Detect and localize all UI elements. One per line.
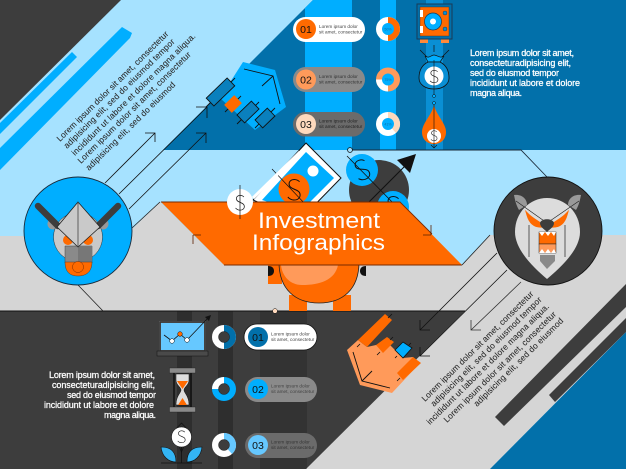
icon: laptop chart xyxy=(157,315,211,356)
icon: piggy bank xyxy=(268,262,366,313)
step 01 pill dark: sit amet, consectetur xyxy=(271,337,315,342)
step 03 pill: 03 xyxy=(300,119,312,131)
title: Investment xyxy=(258,208,380,233)
icon: burning money xyxy=(422,102,446,148)
decorative blue short bar xyxy=(0,52,77,134)
step 01 pill dark: Lorem ipsum dolor xyxy=(271,332,310,336)
background: grey band xyxy=(0,202,626,469)
icon: growth coins and arrow: S xyxy=(347,148,376,191)
text block: bottom right rotated: adipisicing elit, sed do eiusmod tempor xyxy=(428,294,544,408)
icon: dollar coin xyxy=(227,152,300,219)
step 03 pill dark: sit amet, consectetur xyxy=(271,445,315,450)
step 02 pill dark xyxy=(245,377,317,402)
text block: top right: sed do eiusmod tempor xyxy=(470,68,559,78)
text block: top left rotated: incididunt ut labore et dolore magna aliqua. xyxy=(69,31,197,157)
background: light blue xyxy=(0,0,626,236)
text block: top right: incididunt ut labore et dolore xyxy=(470,78,580,88)
step 02 pill dark: sit amet, consectetur xyxy=(271,389,315,394)
step 01 pill: sit amet, consectetur xyxy=(319,30,363,34)
step 03 pill xyxy=(293,112,365,136)
step 03 pill: sit amet, consectetur xyxy=(319,124,363,129)
panel: top dark corner xyxy=(0,0,121,120)
decorative bottom right blue xyxy=(490,332,626,469)
panel: bottom dark xyxy=(0,285,465,469)
icon: candlestick up pentagon xyxy=(206,62,286,130)
step 03 pill dark: 03 xyxy=(252,440,264,452)
text block: top right xyxy=(470,48,580,98)
step 01 pill xyxy=(293,17,365,42)
text block: bottom right rotated: Lorem ipsum dolor sit amet, consectetur xyxy=(441,309,558,424)
step 01 pill: Lorem ipsum dolor xyxy=(319,24,358,29)
arrows: down from bear xyxy=(420,253,521,356)
donut 50%: 50% xyxy=(384,28,392,32)
text block: bottom left: Lorem ipsum dolor sit amet, xyxy=(49,370,155,380)
icon: money plant xyxy=(161,423,202,463)
decorative dark thin bar xyxy=(549,318,626,402)
step 01 pill dark: 01 xyxy=(252,332,264,344)
step 03 pill dark xyxy=(245,433,317,458)
donut two xyxy=(212,377,236,401)
text block: top right: magna aliqua. xyxy=(470,88,522,98)
text block: top right: Lorem ipsum dolor sit amet, xyxy=(470,48,574,58)
text block: top right: consecteturadipisicing elit, xyxy=(470,58,571,68)
step 03 pill: Lorem ipsum dolor xyxy=(319,118,358,124)
banner: title ribbon: Infographics xyxy=(252,230,385,255)
step 02 pill: 02 xyxy=(300,74,312,86)
donut three xyxy=(212,433,236,457)
arrows: up from bull xyxy=(105,107,207,209)
icon: money plant: S xyxy=(177,423,186,448)
text block: bottom right rotated: incididunt ut labore et dolore magna aliqua. xyxy=(424,301,551,426)
decorative dark thick bar xyxy=(495,284,626,426)
step 02 pill: Lorem ipsum dolor xyxy=(319,74,358,79)
text block: top left rotated: Lorem ipsum dolor sit amet, consectetur xyxy=(54,29,170,143)
step 03 pill dark: Lorem ipsum dolor xyxy=(271,440,310,444)
donut 41%: 41% xyxy=(384,122,392,126)
icon: hourglass xyxy=(170,368,196,412)
step 01 pill: 01 xyxy=(300,24,312,36)
text block: top left rotated: Lorem ipsum dolor sit amet, consectetur xyxy=(75,49,193,165)
step 02 pill xyxy=(293,67,365,92)
panel: bottom steps xyxy=(212,324,317,458)
text block: bottom right rotated: Lorem ipsum dolor sit amet, consectetur xyxy=(419,289,535,403)
icon: bear circle xyxy=(494,177,602,285)
text block: top left rotated: adipisicing elit, sed do eiusmod tempor xyxy=(61,36,177,150)
step 01 pill dark xyxy=(244,324,317,350)
panel: top steps xyxy=(293,17,400,136)
icon: money bill xyxy=(253,143,341,220)
decorative blue long bar xyxy=(0,27,132,170)
banner: title ribbon xyxy=(132,202,490,265)
donut 75%: 75% xyxy=(384,78,392,82)
icon: dollar coin: S xyxy=(234,187,246,216)
icon: money bill: S xyxy=(286,169,302,209)
icon: money bag: S xyxy=(429,63,439,89)
icon: candlestick down pentagon xyxy=(347,314,421,393)
icon: growth coins and arrow: S xyxy=(385,186,401,226)
text block: bottom left: incididunt ut labore et dolore xyxy=(44,400,154,410)
icon: burning money: S xyxy=(430,126,438,146)
step 02 pill dark: Lorem ipsum dolor xyxy=(271,384,310,388)
icon: money bag xyxy=(419,45,449,98)
icon: growth coins and arrow xyxy=(346,148,416,226)
donut one xyxy=(212,325,236,349)
icon: bull circle xyxy=(24,177,132,285)
text block: bottom right rotated: adipisicing elit, sed do eiusmod xyxy=(471,315,566,408)
text block: top left rotated: adipisicing elit, sed do eiusmod xyxy=(83,79,178,172)
text block: bottom left: sed do eiusmod tempor xyxy=(67,390,156,400)
step 02 pill dark: 02 xyxy=(252,384,264,396)
text block: bottom left: magna aliqua. xyxy=(104,410,156,420)
panel: top right blue xyxy=(163,0,626,177)
icon: safe xyxy=(417,4,452,43)
text block: bottom left: consecteturadipisicing elit, xyxy=(52,380,155,390)
text block: bottom left xyxy=(44,370,156,420)
step 02 pill: sit amet, consectetur xyxy=(319,80,363,84)
